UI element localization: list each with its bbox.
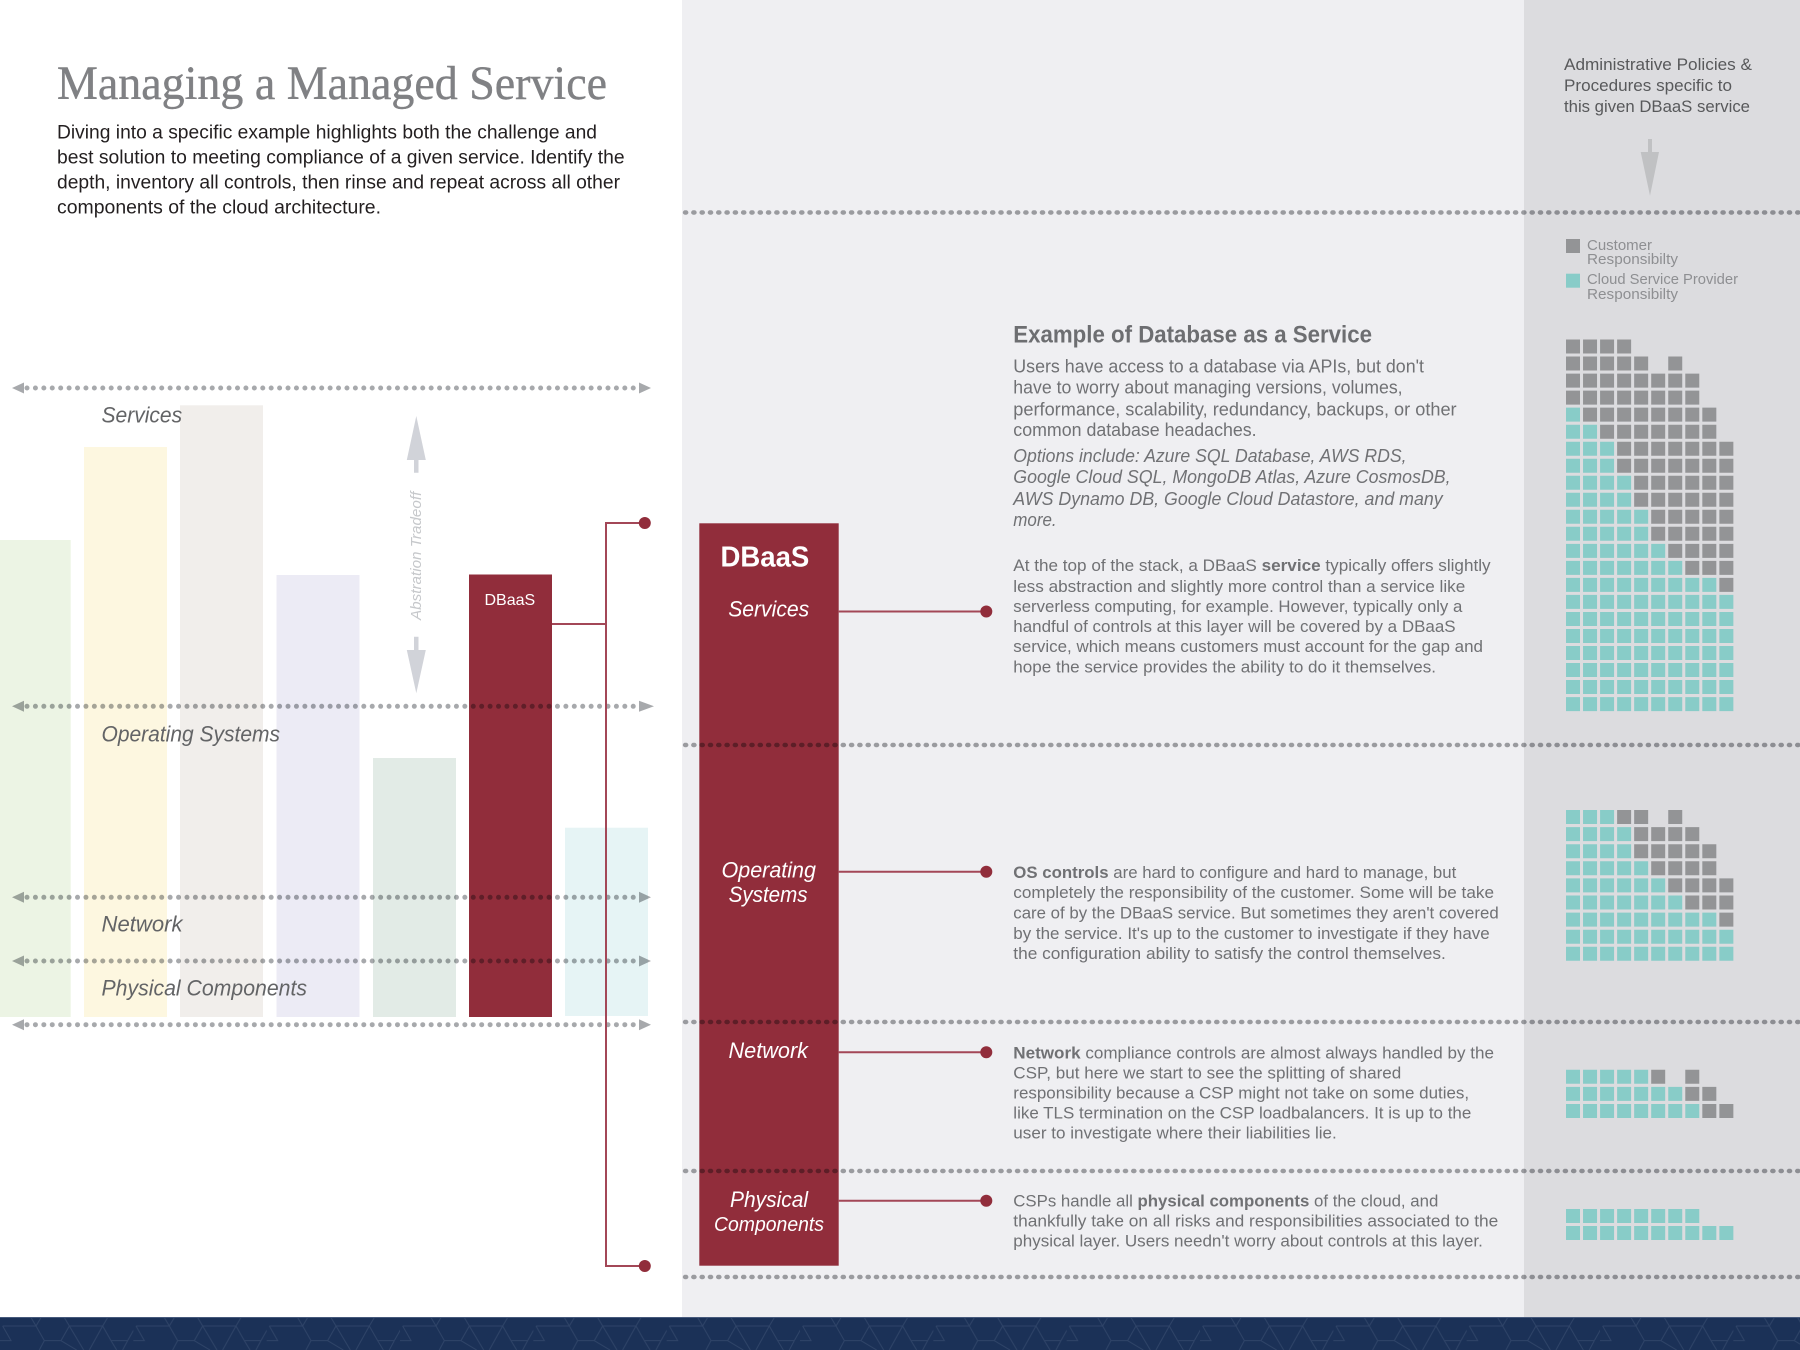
text: network layer: like TLS termination on the CSP loadbalancers. It is up to the [1013, 1103, 1471, 1122]
text: OS layer: the configuration ability to satisfy the control themselves. [1013, 944, 1446, 963]
text: administrative policies note [1564, 55, 1753, 116]
bar: yellow [84, 447, 167, 1017]
arrow: abstraction tradeoff down [407, 637, 426, 693]
text: OS layer: by the service. It's up to the customer to investigate if they have [1013, 924, 1490, 943]
legend: customer responsibility [1566, 238, 1679, 268]
legend: CSP responsibility: Cloud Service Provider [1587, 272, 1738, 288]
bar: DBaaS red [469, 574, 552, 1017]
legend: CSP responsibility [1566, 272, 1738, 303]
text: administrative policies note: this given DBaaS service [1564, 97, 1750, 116]
layer: network: Network [728, 1038, 809, 1063]
text: OS layer: completely the responsibility of the customer. Some will be take [1013, 883, 1494, 902]
left layer labels: Services [102, 402, 182, 428]
control grid: operating systems [1566, 817, 1733, 954]
layer: operating systems [722, 858, 817, 907]
text: administrative policies note: Administrative Policies & [1564, 55, 1753, 74]
panel: responsibility column background [1524, 0, 1800, 1317]
text: physical layer [1013, 1192, 1498, 1251]
control grid: physical components [1566, 1216, 1733, 1233]
text: options list: Options include: Azure SQL Database, AWS RDS, [1013, 446, 1407, 466]
text: services layer: less abstraction and slightly more control than a service like [1013, 577, 1465, 596]
text: administrative policies note: Procedures specific to [1564, 76, 1732, 95]
heading: example of database as a service: Example of Database as a Service [1013, 322, 1372, 348]
layer: services: Services [728, 596, 809, 622]
text: physical layer: physical layer. Users needn't worry about controls at this layer. [1013, 1232, 1483, 1251]
horizontal dotted dividers [685, 212, 1800, 1277]
text: options list: Google Cloud SQL, MongoDB Atlas, Azure CosmosDB, [1013, 467, 1451, 487]
text: services layer: handful of controls at this layer will be covered by a DBaaS [1013, 617, 1456, 636]
text: options list: more. [1013, 510, 1057, 530]
layer: operating systems: Systems [729, 882, 808, 907]
left layer labels: Network [102, 912, 184, 936]
legend: CSP responsibility: Responsibilty [1587, 287, 1679, 303]
text: physical layer: thankfully take on all risks and responsibilities associated to the [1013, 1212, 1498, 1231]
legend [1566, 238, 1738, 303]
left layer labels: Operating Systems [102, 722, 280, 746]
text: network layer: CSP, but here we start to see the splitting of shared [1013, 1063, 1401, 1082]
label: abstraction tradeoff: Abstration Tradeoff [408, 490, 425, 621]
text: network layer: Network compliance controls are almost always handled by the [1013, 1043, 1494, 1062]
heading: DBaaS: DBaaS [720, 542, 809, 574]
text: DBaaS description: common database headaches. [1013, 420, 1257, 440]
text: DBaaS description: have to worry about managing versions, volumes, [1013, 377, 1403, 397]
text: OS layer: OS controls are hard to configure and hard to manage, but [1013, 863, 1457, 882]
text: options list [1012, 446, 1451, 530]
bar chart: abstraction stack [0, 405, 648, 1017]
intro text block [57, 122, 625, 218]
intro text block: components of the cloud architecture. [57, 197, 381, 218]
text: network layer: user to investigate where their liabilities lie. [1013, 1123, 1337, 1142]
connectors from block layers to text [839, 606, 992, 1207]
title: Managing a Managed Service [57, 57, 607, 110]
layer: physical components: Components [714, 1214, 824, 1236]
text: physical layer: CSPs handle all physical components of the cloud, and [1013, 1192, 1438, 1211]
control grid: network [1566, 1077, 1733, 1111]
layer divider arrows on left chart [12, 382, 654, 1030]
bar: pale teal [565, 828, 648, 1016]
text: services layer [1013, 556, 1491, 677]
text: services layer: service, which means customers must account for the gap and [1013, 637, 1483, 656]
intro text block: best solution to meeting compliance of a given service. Identify the [57, 147, 625, 168]
bar: sage [373, 758, 456, 1017]
text: options list: AWS Dynamo DB, Google Cloud Datastore, and many [1012, 489, 1444, 509]
arrow: abstraction tradeoff up [407, 416, 426, 473]
text: network layer: responsibility because a CSP might not take on some duties, [1013, 1083, 1469, 1102]
layer: physical components: Physical [730, 1187, 809, 1212]
text: DBaaS description: Users have access to a database via APIs, but don't [1013, 356, 1424, 376]
text: services layer: hope the service provides the ability to do it themselves. [1013, 658, 1436, 677]
panel: detail background [682, 0, 1524, 1317]
arrow: policies down [1641, 139, 1659, 196]
bracket connector from DBaaS bar [552, 517, 651, 1272]
footer band [0, 1317, 1800, 1350]
text: services layer: At the top of the stack, a DBaaS service typically offers slightly [1013, 556, 1491, 575]
text: network layer [1013, 1043, 1494, 1142]
DBaaS bar label: DBaaS [484, 592, 535, 609]
DBaaS stack block [699, 523, 839, 1266]
left layer labels [102, 402, 307, 1000]
bar: beige [180, 405, 263, 1017]
left layer labels: Physical Components [102, 976, 307, 1000]
text: DBaaS description: performance, scalability, redundancy, backups, or other [1013, 399, 1457, 419]
layer: physical components [714, 1187, 824, 1236]
bar: green [0, 540, 71, 1017]
bar: lavender [276, 575, 360, 1017]
layer: operating systems: Operating [722, 858, 817, 883]
legend: customer responsibility: Responsibilty [1587, 252, 1679, 268]
text: OS layer [1013, 863, 1499, 963]
legend: customer responsibility: Customer [1587, 238, 1652, 254]
control grid: services [1566, 346, 1733, 704]
text: DBaaS description [1013, 356, 1457, 440]
intro text block: Diving into a specific example highlights both the challenge and [57, 122, 597, 143]
text: services layer: serverless computing, for example. However, typically only a [1013, 597, 1463, 616]
text: OS layer: care of by the DBaaS service. But sometimes they aren't covered [1013, 904, 1499, 922]
intro text block: depth, inventory all controls, then rinse and repeat across all other [57, 172, 621, 193]
